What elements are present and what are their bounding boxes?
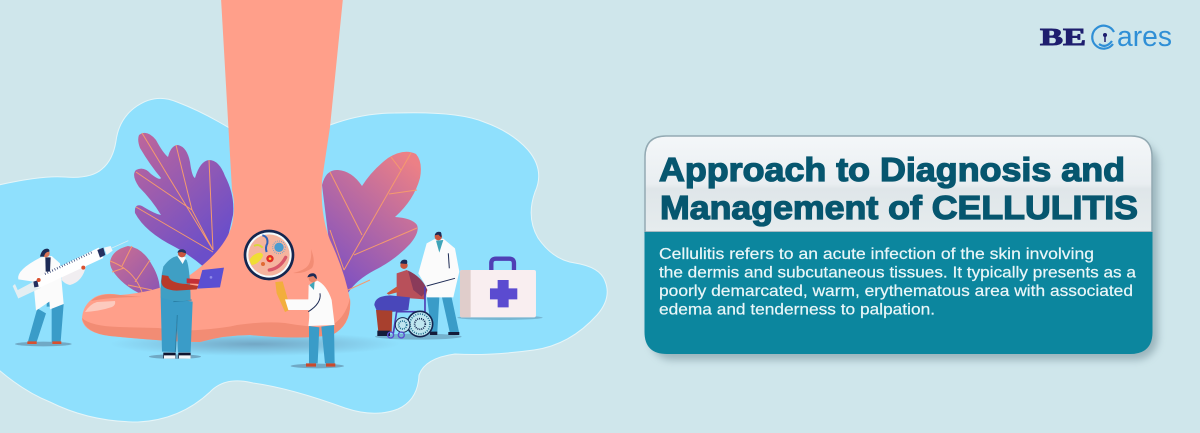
description text: [659, 246, 1136, 318]
toenail: [85, 301, 115, 312]
description text: poorly demarcated, warm, erythematous area with associated: [659, 283, 1133, 300]
figure: patient in wheelchair with doctor: [374, 232, 462, 340]
magnifier: [244, 230, 294, 312]
description text: Cellulitis refers to an acute infection of the skin involving: [659, 246, 1094, 263]
card shadow: [650, 142, 1158, 360]
figure: doctor with syringe: [13, 241, 128, 346]
icon: logo C mark: [1092, 26, 1114, 49]
foot sole shading: [82, 298, 350, 342]
title: Management of CELLULITIS: [660, 189, 1138, 226]
logo: BE Cares: [1040, 21, 1172, 53]
wheelchair: [388, 287, 433, 338]
figure: doctor with magnifying glass: [244, 230, 344, 368]
leaf: small: [110, 246, 160, 295]
icon: first aid kit: [457, 259, 543, 320]
logo: BE Cares: ares: [1117, 21, 1172, 53]
title: Approach to Diagnosis and: [659, 151, 1125, 188]
logo: BE Cares: BE: [1040, 25, 1086, 51]
description text: the dermis and subcutaneous tissues. It typically presents as a: [659, 264, 1136, 282]
toe top shading: [91, 294, 142, 301]
leaf: left large: [134, 133, 233, 268]
ankle bone: [293, 249, 314, 273]
title: [659, 151, 1138, 226]
foot and leg: [82, 0, 350, 342]
figure: medic with laptop: [149, 249, 224, 359]
description text: edema and tenderness to palpation.: [659, 302, 935, 318]
card header: [645, 136, 1152, 232]
background blob: [0, 98, 607, 422]
standing doctor: [418, 232, 459, 335]
card body: [644, 232, 1152, 354]
panel: description card: [644, 136, 1152, 354]
foot shadow: [110, 332, 400, 356]
leaf: right large: [322, 152, 421, 293]
patient: [374, 260, 427, 336]
